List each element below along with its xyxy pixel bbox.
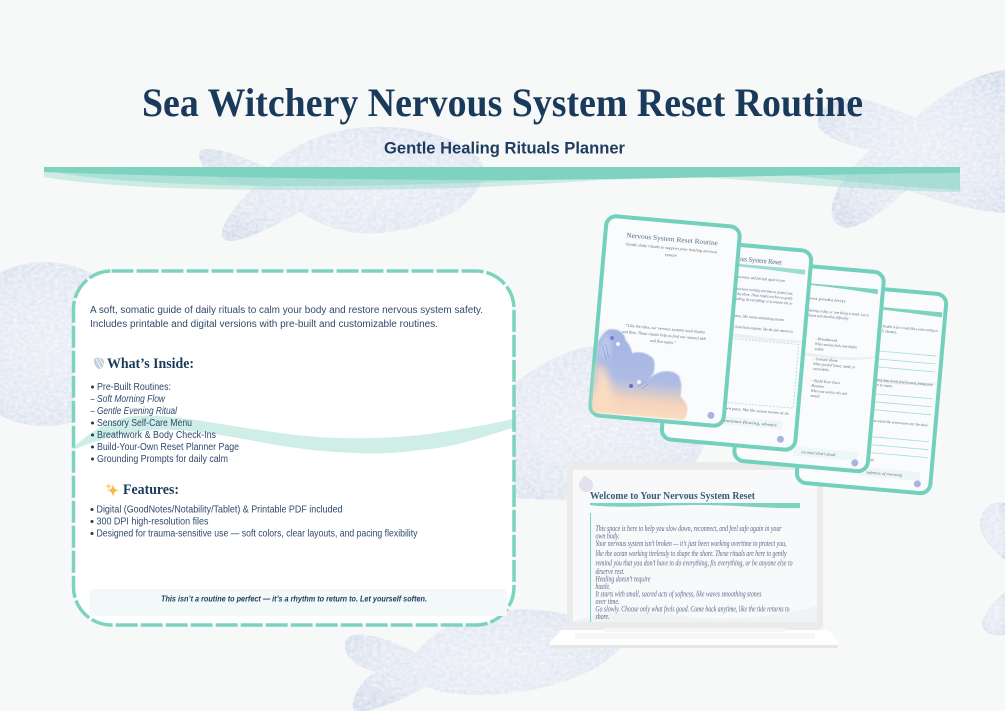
icon: sparkles [105,483,120,497]
list: what's inside: Build-Your-Own Reset Planner Page [97,442,239,453]
heading: what's inside: What’s Inside: [107,356,194,372]
page 1 quote: and flow. These rituals help us find our natural ebb [622,329,706,341]
planner page 3: - Build Your Own [812,378,840,385]
laptop base [550,628,838,648]
planner page 2: Go slowly. Choose only what feels good. Come back anytime, like the tide returns to [678,319,793,335]
screen text: Your nervous system isn’t broken — it’s just been working overtime to protect you, [596,539,786,548]
planner page 4: soften to meet. [869,381,893,388]
page 1 subtitle: system [665,252,677,258]
planner page 3: - Breathwork [815,336,838,343]
page 1 quote: and flow again.” [650,338,677,345]
header wave divider [44,167,960,192]
planner page 2: It starts with small, sacred acts of softness, like waves smoothing stones [678,308,785,323]
planner page 2: This space is here to help you slow down, reconnect, and feel safe again in your [682,269,786,284]
page 1 shell icon [707,412,715,419]
planner page 4: out 5 times. [873,327,898,335]
planner page 4: softness of morning [866,469,902,477]
panel: product description [73,271,514,625]
page 1 quote [621,322,706,348]
panel dashed border [74,271,514,625]
planner page 3: not productivity [810,295,846,303]
laptop bezel [567,462,823,630]
screen heading: Welcome to Your Nervous System Reset [590,490,755,502]
page 1 watercolor illustration [592,328,694,420]
icon: shell [94,358,104,369]
page 1 title: Nervous System Reset Routine [626,231,718,247]
planner page 3: Routine [810,383,825,389]
list: features: Digital (GoodNotes/Notability/Tablet) & Printable PDF included [96,504,342,516]
laptop mockup [550,462,838,648]
planner page 3: When anxiety feels overwhelm [815,341,857,350]
planner page 2: Welcome to Your Nervous System Reset [682,250,782,267]
planner page 3: overwhelm [813,366,829,372]
planner page 4: today [862,456,875,462]
heading: features: Features: [123,482,179,498]
list: what's inside: – [90,394,95,405]
screen text: hustle. [596,582,610,591]
planner page 4: slowly breathe in for a count like a wave coming in [874,322,938,333]
planner page 3: moves each shoreline differently [808,312,849,321]
screen text [595,524,792,621]
list: what's inside: Soft Morning Flow [97,394,166,405]
subtitle: Gentle Healing Rituals Planner [384,138,625,158]
planner page 3: during a day, or one thing a week. Let it [809,307,870,319]
planner page 1 [590,216,740,426]
page 1 subtitle: Gentle daily rituals to support your healing nervous [625,241,718,254]
screen text: This space is here to help you slow down, reconnect, and feel safe again in your [596,524,782,533]
planner page 4: overhead, then slowly fold forward, letting your [869,376,934,388]
planner page 3: not what I think I should [801,449,836,457]
intro text: Includes printable and digital versions with pre-built and customizable routines. [90,319,438,330]
list: what's inside: Pre-Built Routines: [97,382,171,393]
planner page 2: remind you that you don’t have to do everything, fix everything, or to anyone else to [680,291,793,307]
planner page 2 [661,240,812,450]
list: what's inside: Breathwork & Body Check-Ins [97,430,216,441]
planner page 2: I can move through life at my own pace, like the ocean moves at its [670,400,789,417]
list: what's inside: – [90,406,95,417]
planner page 3: When you feel frozen, numb, or [813,361,856,371]
screen text: remind you that you don’t have to do everything, fix everything, or be anyone else to [596,558,792,568]
panel wave decoration [73,416,513,453]
planner page 3 [734,261,884,472]
screen text: shore. [596,612,610,621]
planner page 4 [796,283,947,494]
screen text: like the ocean working tirelessly to shape the shore. These rituals are here to gently [596,549,787,558]
screen text: Healing doesn’t require [595,574,651,584]
title: Sea Witchery Nervous System Reset Routine [142,80,863,125]
callout: closing message: This isn’t a routine to perfect — it’s a rhythm to return to. Let yourself soften. [161,594,427,604]
laptop screen [573,470,817,622]
screen heading underline [590,503,800,508]
planner page 3: - Somatic Reset [814,356,839,363]
screen text: deserve rest. [596,567,624,576]
list: features [90,504,418,540]
list: features: 300 DPI high-resolution files [96,516,208,528]
planner page 3: calm [814,346,824,352]
list: what's inside: Gentle Evening Ritual [97,406,178,417]
screen text: over time. [596,597,620,606]
page 1 subtitle [625,241,718,261]
planner page 3: match [810,393,820,399]
list: what's inside [90,382,239,465]
screen text: own body. [596,532,620,540]
screen text rule [590,513,591,622]
callout: closing message [90,589,507,616]
planner page 2: like the ocean working tirelessly to shape the shore. These rituals are here to gently [681,286,793,301]
list: what's inside: Grounding Prompts for daily calm [97,454,228,465]
list: what's inside: Sensory Self-Care Menu [97,418,192,429]
planner page 4: your waves like ocean waves over the shore. [870,417,929,428]
page 1 quote: “Like the tides, our nervous systems need rhythm [625,323,706,336]
intro text [90,305,483,330]
list: features: Designed for trauma-sensitive use — soft colors, clear layouts, and pacing flexibility [96,528,418,540]
intro text: A soft, somatic guide of daily rituals to calm your body and restore nervous system safety. [90,305,483,316]
planner page 3: When you want to mix and [811,388,848,396]
planner page 2: Your nervous system isn’t broken — it’s just been working overtime to protect you, [681,281,793,297]
planner page 2: sometimes still, sometimes flowing, always [685,414,777,428]
screen text: Go slowly. Choose only what feels good. Come back anytime, like the tide returns to [596,604,790,614]
screen text: It starts with small, sacred acts of softness, like waves smoothing stones [595,590,762,598]
